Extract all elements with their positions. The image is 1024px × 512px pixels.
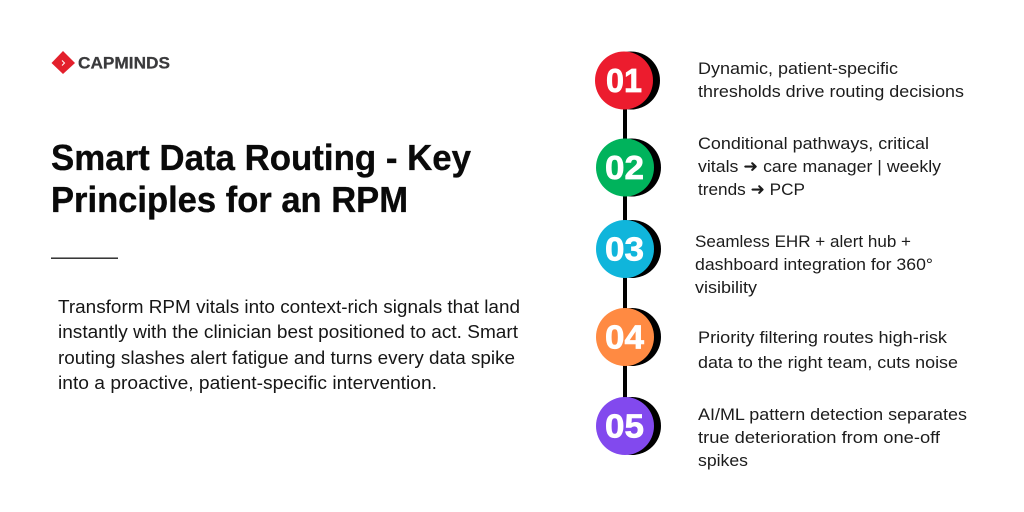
logo: Capminds [52, 51, 170, 74]
badge 04 [596, 308, 661, 366]
intro paragraph [58, 297, 520, 393]
text 05 [698, 405, 967, 470]
step 05 [596, 397, 967, 470]
text 02: Conditional pathways, critical [698, 134, 929, 153]
text 04 [698, 328, 958, 372]
badge 03 [596, 220, 661, 278]
badge 01: 01 [606, 62, 642, 99]
badge 01 [595, 52, 660, 110]
intro paragraph: routing slashes alert fatigue and turns every data spike [58, 348, 515, 368]
intro paragraph: instantly with the clinician best positioned to act. Smart [58, 322, 518, 342]
logo wordmark: CAPMINDS [78, 54, 170, 72]
text 03: visibility [695, 278, 758, 297]
divider [51, 258, 118, 259]
text 02: vitals ➜ care manager | weekly [698, 157, 942, 177]
text 05: true deterioration from one-off [698, 428, 940, 447]
badge 02 [596, 138, 661, 196]
text 03: dashboard integration for 360° [695, 255, 933, 274]
text 01: thresholds drive routing decisions [698, 82, 964, 101]
badge 05: 05 [605, 408, 644, 444]
text 02: trends ➜ PCP [698, 180, 805, 200]
badge 03: 03 [605, 230, 644, 268]
text 04: Priority filtering routes high-risk [698, 328, 948, 347]
intro paragraph: Transform RPM vitals into context-rich signals that land [58, 297, 520, 317]
title: Smart Data Routing - Key [51, 137, 471, 178]
title [51, 137, 471, 220]
timeline connector [623, 100, 627, 410]
text 04: data to the right team, cuts noise [698, 353, 958, 372]
text 01 [698, 59, 964, 101]
title: Principles for an RPM [51, 179, 408, 220]
step 01 [595, 52, 964, 110]
text 03 [695, 232, 933, 297]
text 05: AI/ML pattern detection separates [698, 405, 967, 424]
intro paragraph: into a proactive, patient-specific intervention. [58, 373, 437, 393]
badge 04: 04 [605, 318, 645, 356]
text 02 [698, 134, 942, 200]
step 02 [596, 134, 942, 200]
text 05: spikes [698, 451, 748, 470]
badge 02: 02 [605, 149, 644, 186]
step 03 [596, 220, 933, 297]
step 04 [596, 308, 958, 372]
text 03: Seamless EHR + alert hub + [695, 232, 911, 251]
icon: red diamond [52, 51, 75, 74]
badge 05 [596, 397, 661, 455]
text 01: Dynamic, patient-specific [698, 59, 899, 78]
